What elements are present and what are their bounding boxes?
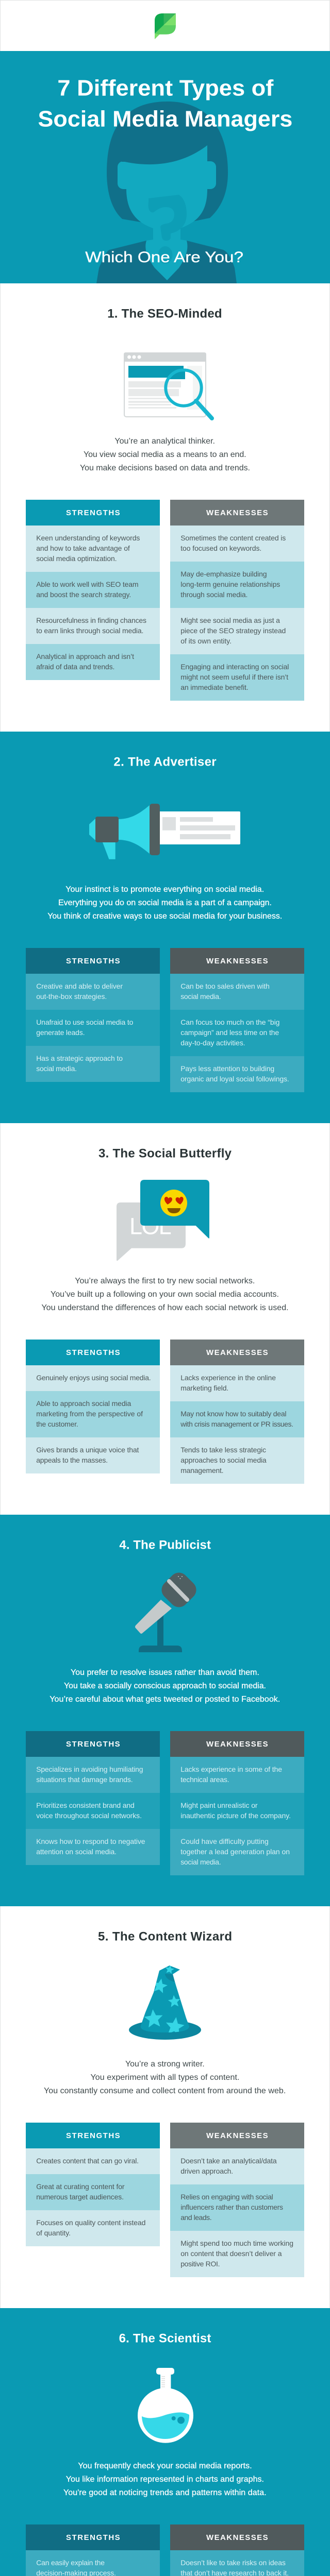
strengths column: Resourcefulness in finding chances [36, 616, 146, 624]
weaknesses column [170, 2524, 304, 2576]
weaknesses column: Can be too sales driven with [180, 982, 270, 990]
heading: 4. The Publicist [119, 1538, 211, 1552]
strengths column: situations that damage brands. [36, 1775, 133, 1784]
strengths column: Able to work well with SEO team [36, 580, 139, 588]
weaknesses column: driven approach. [180, 2167, 233, 2175]
icon: flask [138, 2368, 193, 2443]
weaknesses column: might not seem useful if there isn’t [180, 673, 288, 681]
weaknesses column: WEAKNESSES [206, 957, 268, 965]
description [47, 885, 282, 921]
title [38, 75, 292, 132]
heading: 1. The SEO-Minded [107, 307, 222, 321]
strengths column: the customer. [36, 1420, 78, 1428]
strengths column [26, 1340, 160, 1473]
description: You're good at noticing trends and patterns within data. [63, 2488, 267, 2497]
header: logo band [0, 0, 330, 51]
weaknesses column: Sometimes the content created is [180, 534, 286, 542]
strengths column: Keen understanding of keywords [36, 534, 140, 542]
title: 7 Different Types of [57, 75, 274, 100]
strengths column: Gives brands a unique voice that [36, 1446, 139, 1454]
description [63, 2462, 267, 2497]
description [50, 1668, 280, 1704]
description: Your instinct is to promote everything on social media. [65, 885, 264, 894]
description: You like information represented in charts and graphs. [66, 2475, 264, 2484]
panel: 1 The SEO-Minded [0, 283, 330, 732]
strengths column: out-the-box strategies. [36, 992, 107, 1001]
strengths column: Genuinely enjoys using social media. [36, 1374, 151, 1382]
icon: sprout leaf logo [155, 13, 176, 39]
strengths column: generate leads. [36, 1028, 85, 1037]
strengths column: numerous target audiences. [36, 2193, 124, 2201]
description: You prefer to resolve issues rather than avoid them. [71, 1668, 259, 1677]
description: You constantly consume and collect content from around the web. [44, 2087, 286, 2095]
strengths column: Able to approach social media [36, 1399, 131, 1408]
strengths column: STRENGTHS [66, 1348, 120, 1357]
illustration: faceless person with question mark [96, 101, 237, 283]
description: You make decisions based on data and trends. [80, 464, 250, 472]
weaknesses column: Can focus too much on the “big [180, 1018, 279, 1026]
description [44, 2060, 286, 2095]
strengths column: Specializes in avoiding humiliating [36, 1765, 143, 1773]
description: You experiment with all types of content. [91, 2073, 239, 2082]
strengths column: Creative and able to deliver [36, 982, 123, 990]
strengths column [26, 948, 160, 1082]
description: You’re careful about what gets tweeted or posted to Facebook. [50, 1695, 280, 1704]
strengths column: marketing from the perspective of [36, 1410, 143, 1418]
strengths column: Focuses on quality content instead [36, 2218, 145, 2227]
icon: wizard hat with stars [129, 1964, 201, 2040]
heading: 3. The Social Butterfly [98, 1147, 232, 1161]
weaknesses column: with crisis management or PR issues. [180, 1420, 293, 1428]
weaknesses column: day-to-day activities. [180, 1039, 245, 1047]
weaknesses column [170, 2123, 304, 2277]
weaknesses column: organic and loyal social followings. [180, 1075, 289, 1083]
weaknesses column: through social media. [180, 590, 248, 599]
weaknesses column: WEAKNESSES [206, 2131, 268, 2140]
strengths column: STRENGTHS [66, 509, 120, 517]
weaknesses column: an immediate benefit. [180, 683, 249, 691]
description: You’re a strong writer. [125, 2060, 205, 2069]
weaknesses column: Pays less attention to building [180, 1064, 274, 1073]
strengths column: Unafraid to use social media to [36, 1018, 134, 1026]
weaknesses column: Doesn’t like to take risks on ideas [180, 2558, 286, 2567]
strengths column: and boost the search strategy. [36, 590, 131, 599]
weaknesses column: May de-emphasize building [180, 570, 267, 578]
weaknesses column: positive ROI. [180, 2260, 220, 2268]
weaknesses column: Might see social media as just a [180, 616, 280, 624]
strengths column: STRENGTHS [66, 2533, 120, 2542]
icon: chat bubbles with emoji [117, 1180, 209, 1261]
strengths column: Creates content that can go viral. [36, 2157, 139, 2165]
strengths column: Prioritizes consistent brand and [36, 1801, 135, 1809]
strengths column: of quantity. [36, 2229, 71, 2237]
strengths column: Can easily explain the [36, 2558, 105, 2567]
weaknesses column: WEAKNESSES [206, 509, 268, 517]
description [80, 437, 250, 472]
strengths column: Analytical in approach and isn’t [36, 652, 134, 660]
description: You think of creative ways to use social media for your business. [47, 912, 282, 921]
weaknesses column: campaign” and less time on the [180, 1028, 279, 1037]
weaknesses column: Doesn’t take an analytical/data [180, 2157, 277, 2165]
strengths column: to earn links through social media. [36, 626, 143, 635]
hero panel [0, 51, 330, 283]
weaknesses column: approaches to social media [180, 1456, 267, 1464]
strengths column: STRENGTHS [66, 2131, 120, 2140]
strengths column: and how to take advantage of [36, 544, 130, 552]
strengths column: STRENGTHS [66, 1740, 120, 1749]
description: You take a socially conscious approach to social media. [64, 1682, 266, 1690]
strengths column [26, 1731, 160, 1865]
weaknesses column: influencers rather than customers [180, 2203, 283, 2211]
description: You’re an analytical thinker. [114, 437, 215, 446]
panel: 3 The Social Butterfly [0, 1123, 330, 1515]
description [41, 1277, 289, 1312]
weaknesses column: Lacks experience in some of the [180, 1765, 282, 1773]
icon: microphone on stand [135, 1569, 200, 1652]
weaknesses column: Lacks experience in the online [180, 1374, 276, 1382]
weaknesses column: piece of the SEO strategy instead [180, 626, 286, 635]
weaknesses column: Might paint unrealistic or [180, 1801, 258, 1809]
strengths column: Great at curating content for [36, 2182, 125, 2191]
weaknesses column [170, 1340, 304, 1484]
weaknesses column: social media. [180, 1858, 221, 1866]
weaknesses column: too focused on keywords. [180, 544, 261, 552]
weaknesses column: Tends to take less strategic [180, 1446, 266, 1454]
weaknesses column: Could have difficulty putting [180, 1837, 269, 1845]
strengths column: social media optimization. [36, 554, 117, 563]
description: You’ve built up a following on your own social media accounts. [51, 1290, 279, 1299]
panel: 2 The Advertiser [0, 732, 330, 1123]
weaknesses column: management. [180, 1466, 224, 1475]
weaknesses column: and leads. [180, 2213, 212, 2222]
weaknesses column: Relies on engaging with social [180, 2193, 273, 2201]
panel: 6 The Scientist [0, 2308, 330, 2576]
heading: 5. The Content Wizard [98, 1930, 232, 1944]
panel: 4 The Publicist [0, 1515, 330, 1906]
strengths column [26, 2524, 160, 2576]
description: Everything you do on social media is a part of a campaign. [58, 899, 272, 907]
heading: 2. The Advertiser [113, 755, 217, 769]
weaknesses column: WEAKNESSES [206, 2533, 268, 2542]
strengths column: afraid of data and trends. [36, 663, 114, 671]
strengths column: Has a strategic approach to [36, 1054, 123, 1062]
icon: megaphone with card [89, 804, 240, 859]
weaknesses column [170, 500, 304, 701]
weaknesses column: May not know how to suitably deal [180, 1410, 287, 1418]
title: Social Media Managers [38, 107, 292, 132]
description: You’re always the first to try new social networks. [75, 1277, 255, 1285]
weaknesses column: inauthentic picture of the company. [180, 1811, 291, 1820]
weaknesses column: social media. [180, 992, 221, 1001]
weaknesses column: on content that doesn’t deliver a [180, 2249, 282, 2258]
icon: chat bubbles with emoji: LOL [129, 1213, 172, 1240]
weaknesses column: Engaging and interacting on social [180, 663, 289, 671]
strengths column: STRENGTHS [66, 957, 120, 965]
weaknesses column [170, 1731, 304, 1875]
weaknesses column: marketing field. [180, 1384, 228, 1392]
panel: 5 The Content Wizard [0, 1906, 330, 2308]
weaknesses column: WEAKNESSES [206, 1348, 268, 1357]
strengths column: Knows how to respond to negative [36, 1837, 145, 1845]
weaknesses column: Might spend too much time working [180, 2239, 293, 2247]
strengths column: attention on social media. [36, 1848, 117, 1856]
weaknesses column [170, 948, 304, 1092]
description: You view social media as a means to an end. [84, 450, 246, 459]
subtitle: Which One Are You? [85, 249, 243, 266]
heading: 6. The Scientist [119, 2332, 211, 2346]
strengths column: voice throughout social networks. [36, 1811, 142, 1820]
strengths column: social media. [36, 1064, 77, 1073]
weaknesses column: long-term genuine relationships [180, 580, 280, 588]
weaknesses column: together a lead generation plan on [180, 1848, 290, 1856]
weaknesses column: technical areas. [180, 1775, 229, 1784]
description: You understand the differences of how each social network is used. [41, 1303, 289, 1312]
description: You frequently check your social media reports. [78, 2462, 252, 2470]
strengths column [26, 2123, 160, 2246]
icon: browser with magnifying glass [124, 352, 212, 418]
weaknesses column: of its own entity. [180, 637, 232, 645]
strengths column: appeals to the masses. [36, 1456, 108, 1464]
strengths column [26, 500, 160, 680]
weaknesses column: WEAKNESSES [206, 1740, 268, 1749]
